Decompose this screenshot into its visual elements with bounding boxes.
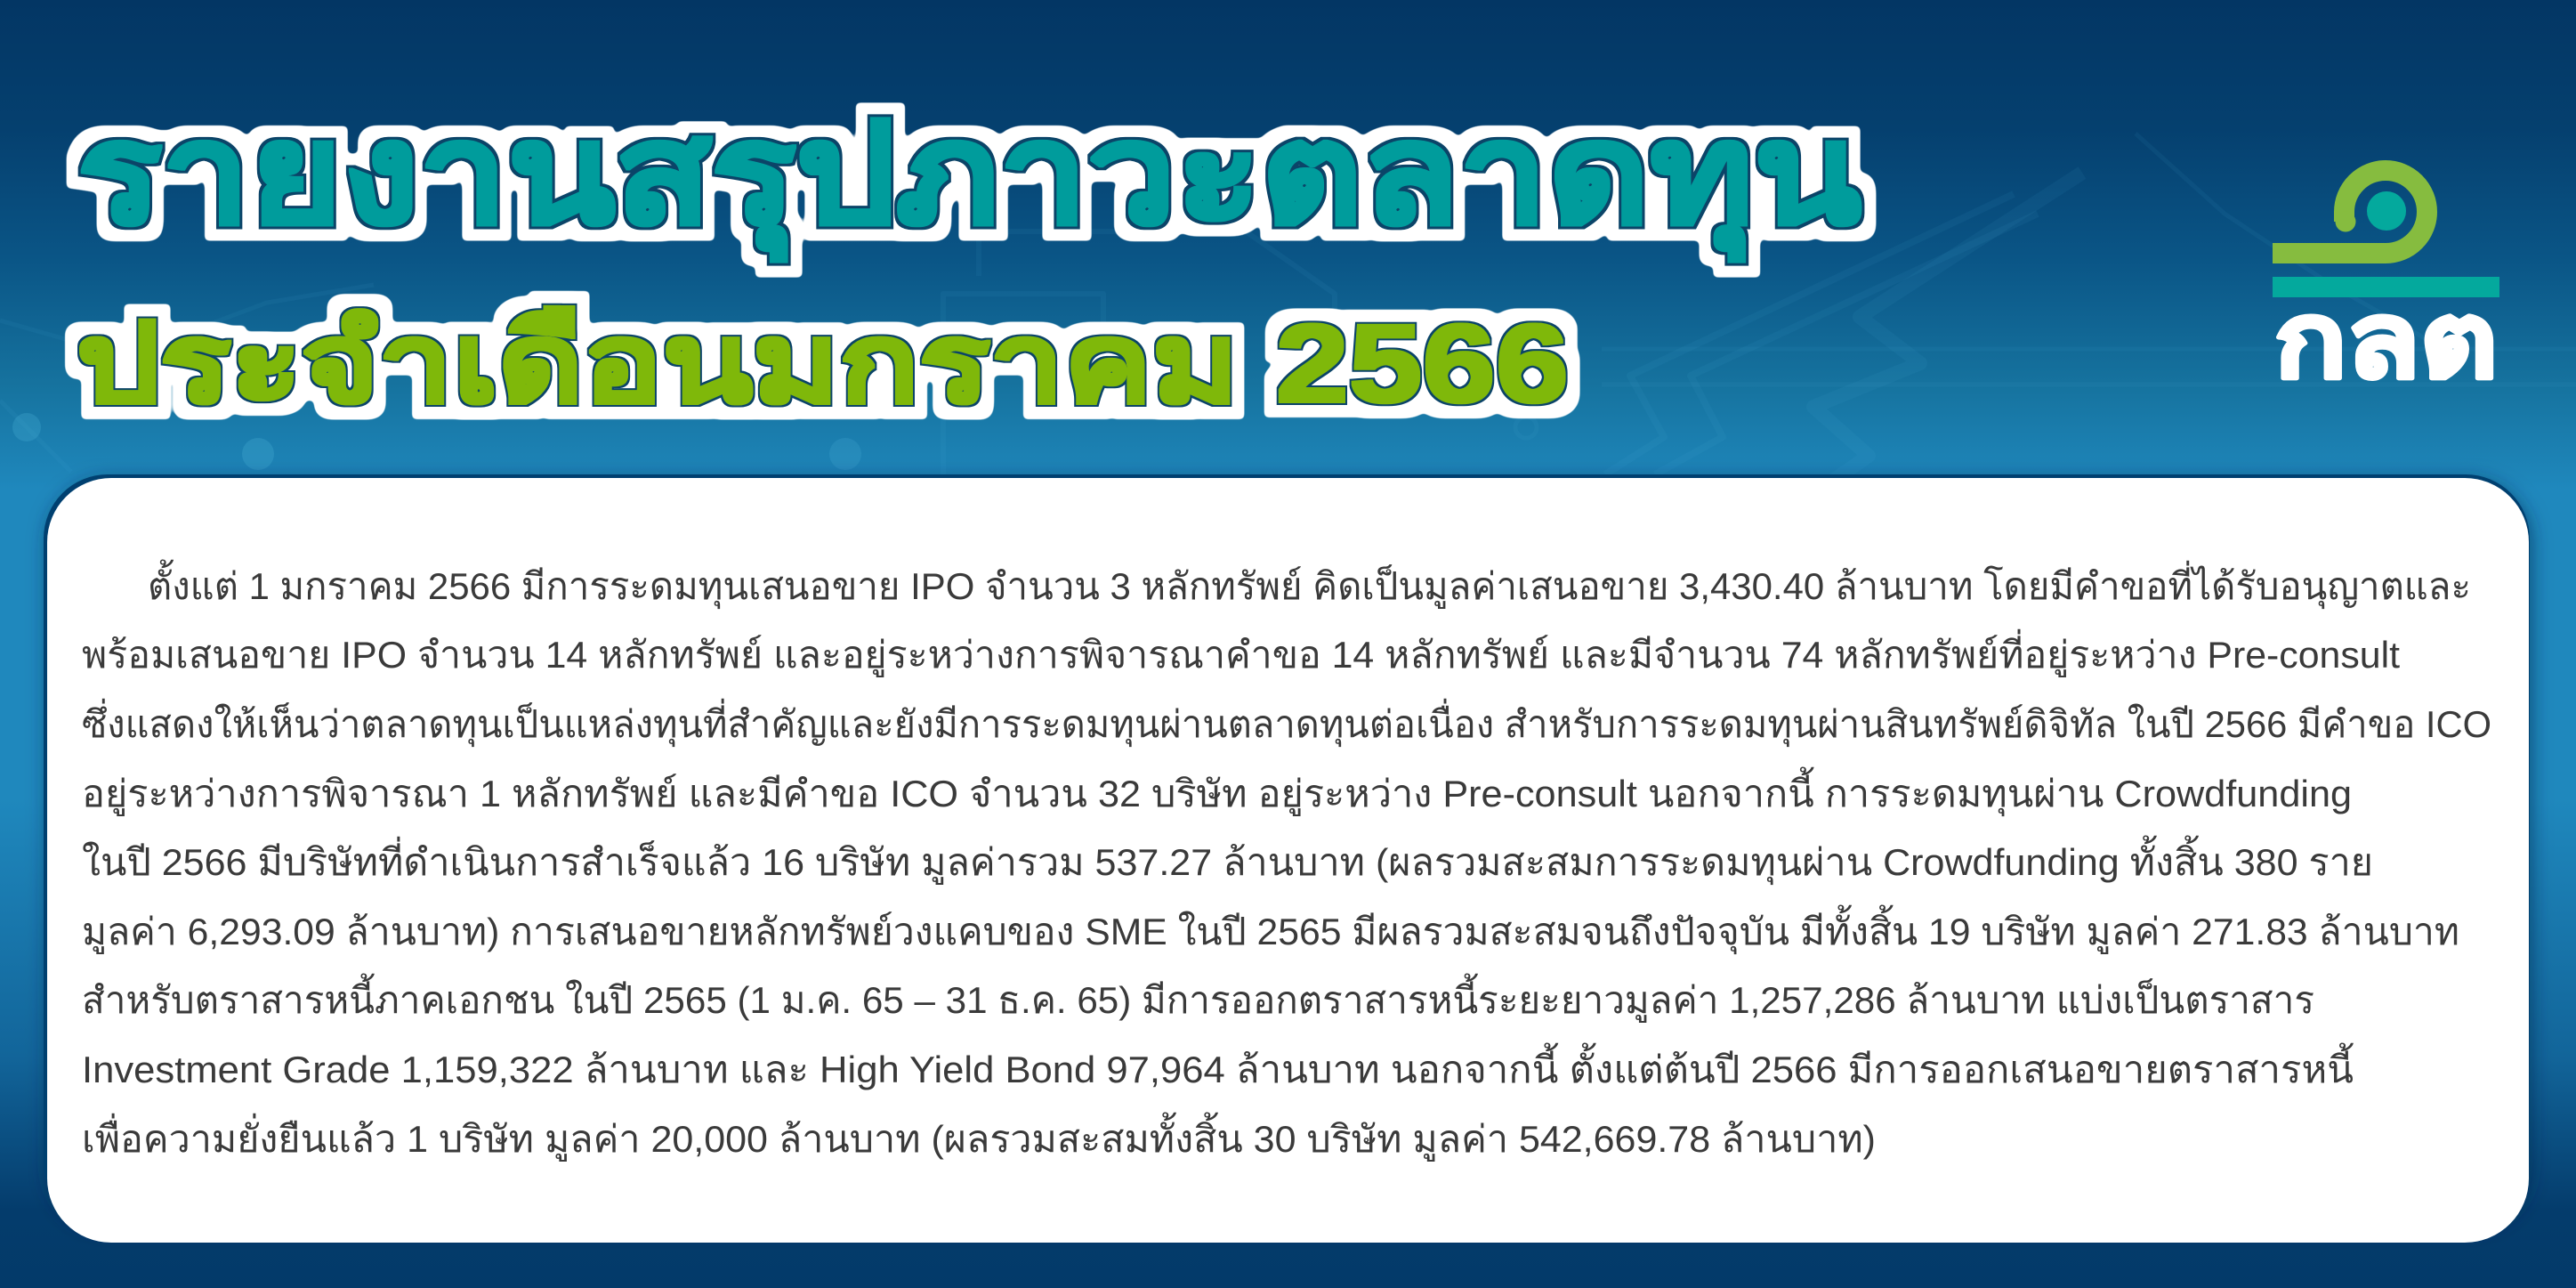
logo green swirl — [2273, 171, 2427, 253]
body text block — [82, 559, 2491, 1162]
body text block: เพื่อความยั่งยืนแล้ว 1 บริษัท มูลค่า 20,000 ล้านบาท (ผลรวมสะสมทั้งสิ้น 30 บริษัท มูลค่า 542,669.78 ล้านบาท) — [82, 1112, 1876, 1162]
logo lettering: กลต — [2274, 282, 2498, 400]
card dark top rim — [44, 474, 2530, 1227]
logo teal dot — [2367, 191, 2406, 231]
card white surface — [47, 478, 2529, 1243]
panel: summary card — [44, 474, 2530, 1243]
body text block: Investment Grade 1,159,322 ล้านบาท และ High Yield Bond 97,964 ล้านบาท นอกจากนี้ ตั้งแต่ต้นปี 2566 มีการออกเสนอขายตราสารหนี้ — [82, 1042, 2354, 1090]
icon: SEC Thailand logo — [2273, 171, 2499, 400]
background circuit pattern — [0, 134, 2576, 481]
body text block: อยู่ระหว่างการพิจารณา 1 หลักทรัพย์ และมีคำขอ ICO จำนวน 32 บริษัท อยู่ระหว่าง Pre-consult นอกจากนี้ การระดมทุนผ่าน Crowdfunding — [82, 766, 2352, 817]
body text block: ในปี 2566 มีบริษัทที่ดำเนินการสำเร็จแล้ว 16 บริษัท มูลค่ารวม 537.27 ล้านบาท (ผลรวมสะสมการระดมทุนผ่าน Crowdfunding ทั้งสิ้น 380 ราย — [82, 835, 2373, 886]
title — [77, 96, 1861, 425]
title line 2: ประจำเดือนมกราคม 2566 — [77, 303, 1569, 425]
body text block: ซึ่งแสดงให้เห็นว่าตลาดทุนเป็นแหล่งทุนที่สำคัญและยังมีการระดมทุนผ่านตลาดทุนต่อเนื่อง สำหรับการระดมทุนผ่านสินทรัพย์ดิจิทัล ในปี 2566 มีคำขอ ICO — [82, 699, 2491, 748]
logo teal bar — [2273, 277, 2499, 297]
body text block: พร้อมเสนอขาย IPO จำนวน 14 หลักทรัพย์ และอยู่ระหว่างการพิจารณาคำขอ 14 หลักทรัพย์ และมีจำนวน 74 หลักทรัพย์ที่อยู่ระหว่าง Pre-consult — [82, 629, 2400, 677]
title line 1: รายงานสรุปภาวะตลาดทุน — [77, 96, 1861, 262]
body text block: มูลค่า 6,293.09 ล้านบาท) การเสนอขายหลักทรัพย์วงแคบของ SME ในปี 2565 มีผลรวมสะสมจนถึงปัจจุบัน มีทั้งสิ้น 19 บริษัท มูลค่า 271.83 ล้านบาท — [82, 904, 2459, 955]
body text block: ตั้งแต่ 1 มกราคม 2566 มีการระดมทุนเสนอขาย IPO จำนวน 3 หลักทรัพย์ คิดเป็นมูลค่าเสนอขาย 3,430.40 ล้านบาท โดยมีคำขอที่ได้รับอนุญาตและ — [148, 559, 2471, 610]
body text block: สำหรับตราสารหนี้ภาคเอกชน ในปี 2565 (1 ม.ค. 65 – 31 ธ.ค. 65) มีการออกตราสารหนี้ระยะยาวมูลค่า 1,257,286 ล้านบาท แบ่งเป็นตราสาร — [82, 973, 2314, 1023]
